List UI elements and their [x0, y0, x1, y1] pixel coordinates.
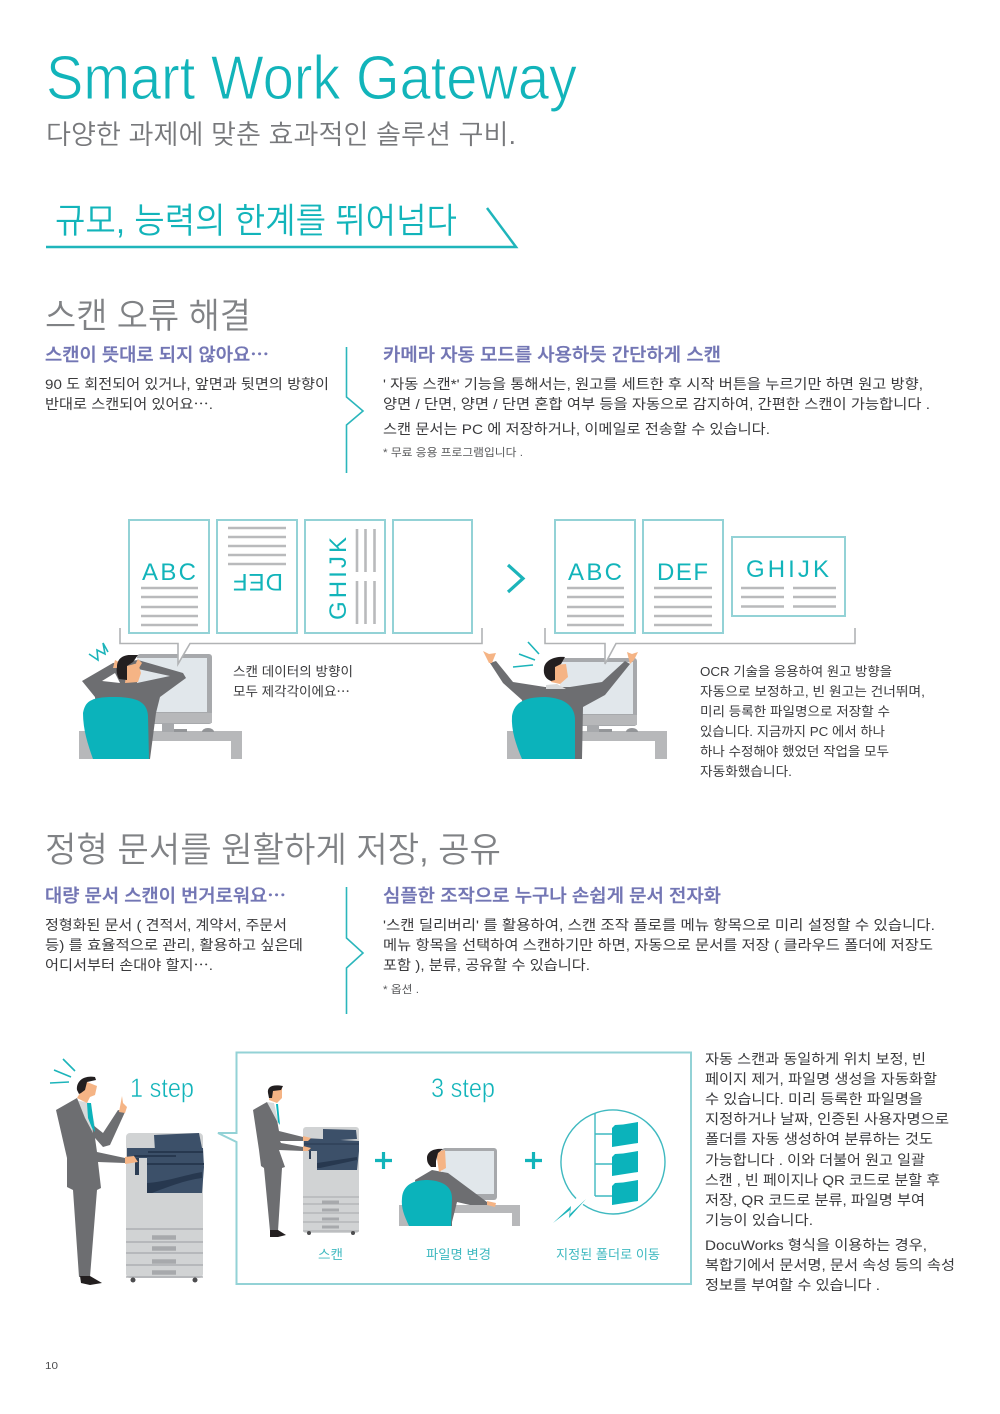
illustration: one step worker and printer [50, 1059, 204, 1285]
panel: scan solution: 양면 / 단면, 양면 / 단면 혼합 여부 등을 자동으로 감지하여, 간편한 스캔이 가능합니다 . [383, 396, 930, 412]
panel: scan problem: 스캔이 뜻대로 되지 않아요 … [45, 341, 269, 367]
panel: storage problem: 대량 문서 스캔이 번거로워요 … [45, 882, 286, 908]
page: ABC sorted [555, 520, 635, 633]
text block: automatic details: 수 있습니다. 미리 등록한 파일명을 [705, 1091, 923, 1107]
panel: storage solution: 메뉴 항목을 선택하여 스캔하기만 하면, 자동으로 문서를 저장 ( 클라우드 폴더에 저장도 [383, 937, 933, 953]
caption: OCR: 있습니다. 지금까지 PC 에서 하나 [700, 724, 885, 739]
panel: storage solution [383, 886, 935, 996]
text block: automatic details: 폴더를 자동 생성하여 분류하는 것도 [705, 1131, 933, 1147]
bracket callout left [120, 628, 482, 664]
step label: 3 step: 3 step [431, 1073, 495, 1103]
page: ABC sorted: ABC [568, 559, 622, 586]
panel: scan solution [383, 345, 930, 459]
panel: scan problem [45, 341, 329, 414]
label: rename: 파일명 변경 [426, 1247, 491, 1262]
page: DEF upside down: DEF [233, 568, 283, 595]
arrow divider 1 [346, 347, 363, 473]
panel: storage problem: 정형화된 문서 ( 견적서, 계약서, 주문서 [45, 917, 287, 933]
icon: folder tree in circle [553, 1110, 665, 1223]
diagram: sorted documents [555, 520, 845, 633]
caption: OCR: OCR 기술을 응용하여 원고 방향을 [700, 664, 892, 679]
text block: automatic details: 기능이 있습니다. [705, 1212, 813, 1228]
text block: automatic details: DocuWorks 형식을 이용하는 경우, [705, 1237, 927, 1253]
caption: OCR: 자동화했습니다. [700, 764, 792, 779]
caption: OCR: 미리 등록한 파일명으로 저장할 수 [700, 704, 890, 719]
text block: automatic details: 페이지 제거, 파일명 생성을 자동화할 [705, 1071, 937, 1087]
text block: automatic details: 정보를 부여할 수 있습니다 . [705, 1277, 880, 1293]
icon: joy marks [513, 642, 539, 667]
illustration: happy worker [483, 642, 667, 759]
text block: automatic details: 가능합니다 . 이와 더불어 원고 일괄 [705, 1152, 925, 1168]
panel: scan solution: 스캔 문서는 PC 에 저장하거나, 이메일로 전송할 수 있습니다. [383, 421, 770, 437]
panel: scan solution: ' 자동 스캔*' 기능을 통해서는, 원고를 세트한 후 시작 버튼을 누르기만 하면 원고 방향, [383, 376, 923, 392]
panel: storage solution: 심플한 조작으로 누구나 손쉽게 문서 전자화 [383, 886, 721, 906]
icon: idea marks [50, 1059, 75, 1083]
caption: problem: 모두 제각각이에요 … [233, 681, 350, 700]
label: scan: 스캔 [318, 1247, 343, 1262]
arrow: before to after [508, 565, 523, 592]
caption: OCR [700, 664, 925, 779]
caption: OCR: 하나 수정해야 했었던 작업을 모두 [700, 744, 889, 759]
panel: scan solution: * 무료 응용 프로그램입니다 . [383, 446, 523, 459]
page: ABC [129, 520, 209, 633]
illustration: step rename [399, 1148, 520, 1226]
panel: storage problem: 어디서부터 손대야 할지 …. [45, 955, 213, 975]
page number: 10 [45, 1360, 58, 1372]
page: DEF sorted: DEF [657, 559, 708, 586]
page: blank [393, 520, 472, 633]
page: DEF sorted [643, 520, 723, 633]
title: Smart Work Gateway [46, 44, 577, 113]
label: move to folder: 지정된 폴더로 이동 [556, 1247, 660, 1262]
text block: automatic details: 지정하거나 날짜, 인증된 사용자명으로 [705, 1111, 949, 1127]
panel: storage solution: * 옵션 . [383, 983, 419, 996]
text block: automatic details: 복합기에서 문서명, 문서 속성 등의 속성 [705, 1257, 955, 1273]
page: GHIJK landscape [732, 537, 845, 616]
caption: problem: 스캔 데이터의 방향이 [233, 664, 353, 679]
page: GHIJK rotated [305, 520, 385, 633]
section heading: scan errors: 스캔 오류 해결 [45, 297, 251, 336]
bracket callout right [545, 628, 855, 664]
text block: automatic details: 스캔 , 빈 페이지나 QR 코드로 분할 후 [705, 1172, 940, 1188]
panel: storage solution: 포함 ), 분류, 공유할 수 있습니다. [383, 957, 590, 973]
page: ABC: ABC [142, 559, 196, 586]
icon: plus 1 [375, 1152, 392, 1169]
section heading: document storage: 정형 문서를 원활하게 저장, 공유 [45, 831, 501, 870]
page: GHIJK rotated: GHIJK [325, 537, 352, 620]
illustration: step scan [253, 1085, 359, 1237]
page: GHIJK landscape: GHIJK [746, 556, 829, 583]
page: DEF upside down [217, 520, 297, 633]
section banner heading: 규모, 능력의 한계를 뛰어넘다 [55, 202, 457, 241]
panel: scan problem: 90 도 회전되어 있거나, 앞면과 뒷면의 방향이 [45, 376, 329, 392]
illustration: frustrated worker [79, 654, 242, 759]
text block: automatic details [705, 1051, 955, 1293]
icon: plus 2 [525, 1152, 542, 1169]
printer small [303, 1127, 359, 1235]
text block: automatic details: 저장, QR 코드로 분류, 파일명 부여 [705, 1192, 925, 1208]
icon: stress mark zigzag [89, 643, 108, 660]
panel: scan solution: 카메라 자동 모드를 사용하듯 간단하게 스캔 [383, 345, 721, 365]
panel: storage solution: '스캔 딜리버리' 를 활용하여, 스캔 조작 플로를 메뉴 항목으로 미리 설정할 수 있습니다. [383, 917, 935, 933]
diagram: unsorted documents [129, 520, 472, 633]
caption: problem [233, 664, 353, 700]
printer large [126, 1133, 204, 1282]
panel: storage problem: 등) 를 효율적으로 관리, 활용하고 싶은데 [45, 937, 303, 953]
icon: lightning [553, 1199, 586, 1223]
step label: 1 step: 1 step [130, 1073, 194, 1103]
panel: storage problem [45, 882, 303, 975]
panel: three step callout [218, 1052, 691, 1284]
subtitle: 다양한 과제에 맞춘 효과적인 솔루션 구비. [46, 120, 516, 150]
arrow divider 2 [346, 887, 363, 1014]
panel: scan problem: 반대로 스캔되어 있어요 …. [45, 394, 213, 414]
caption: OCR: 자동으로 보정하고, 빈 원고는 건너뛰며, [700, 684, 925, 699]
text block: automatic details: 자동 스캔과 동일하게 위치 보정, 빈 [705, 1051, 926, 1067]
